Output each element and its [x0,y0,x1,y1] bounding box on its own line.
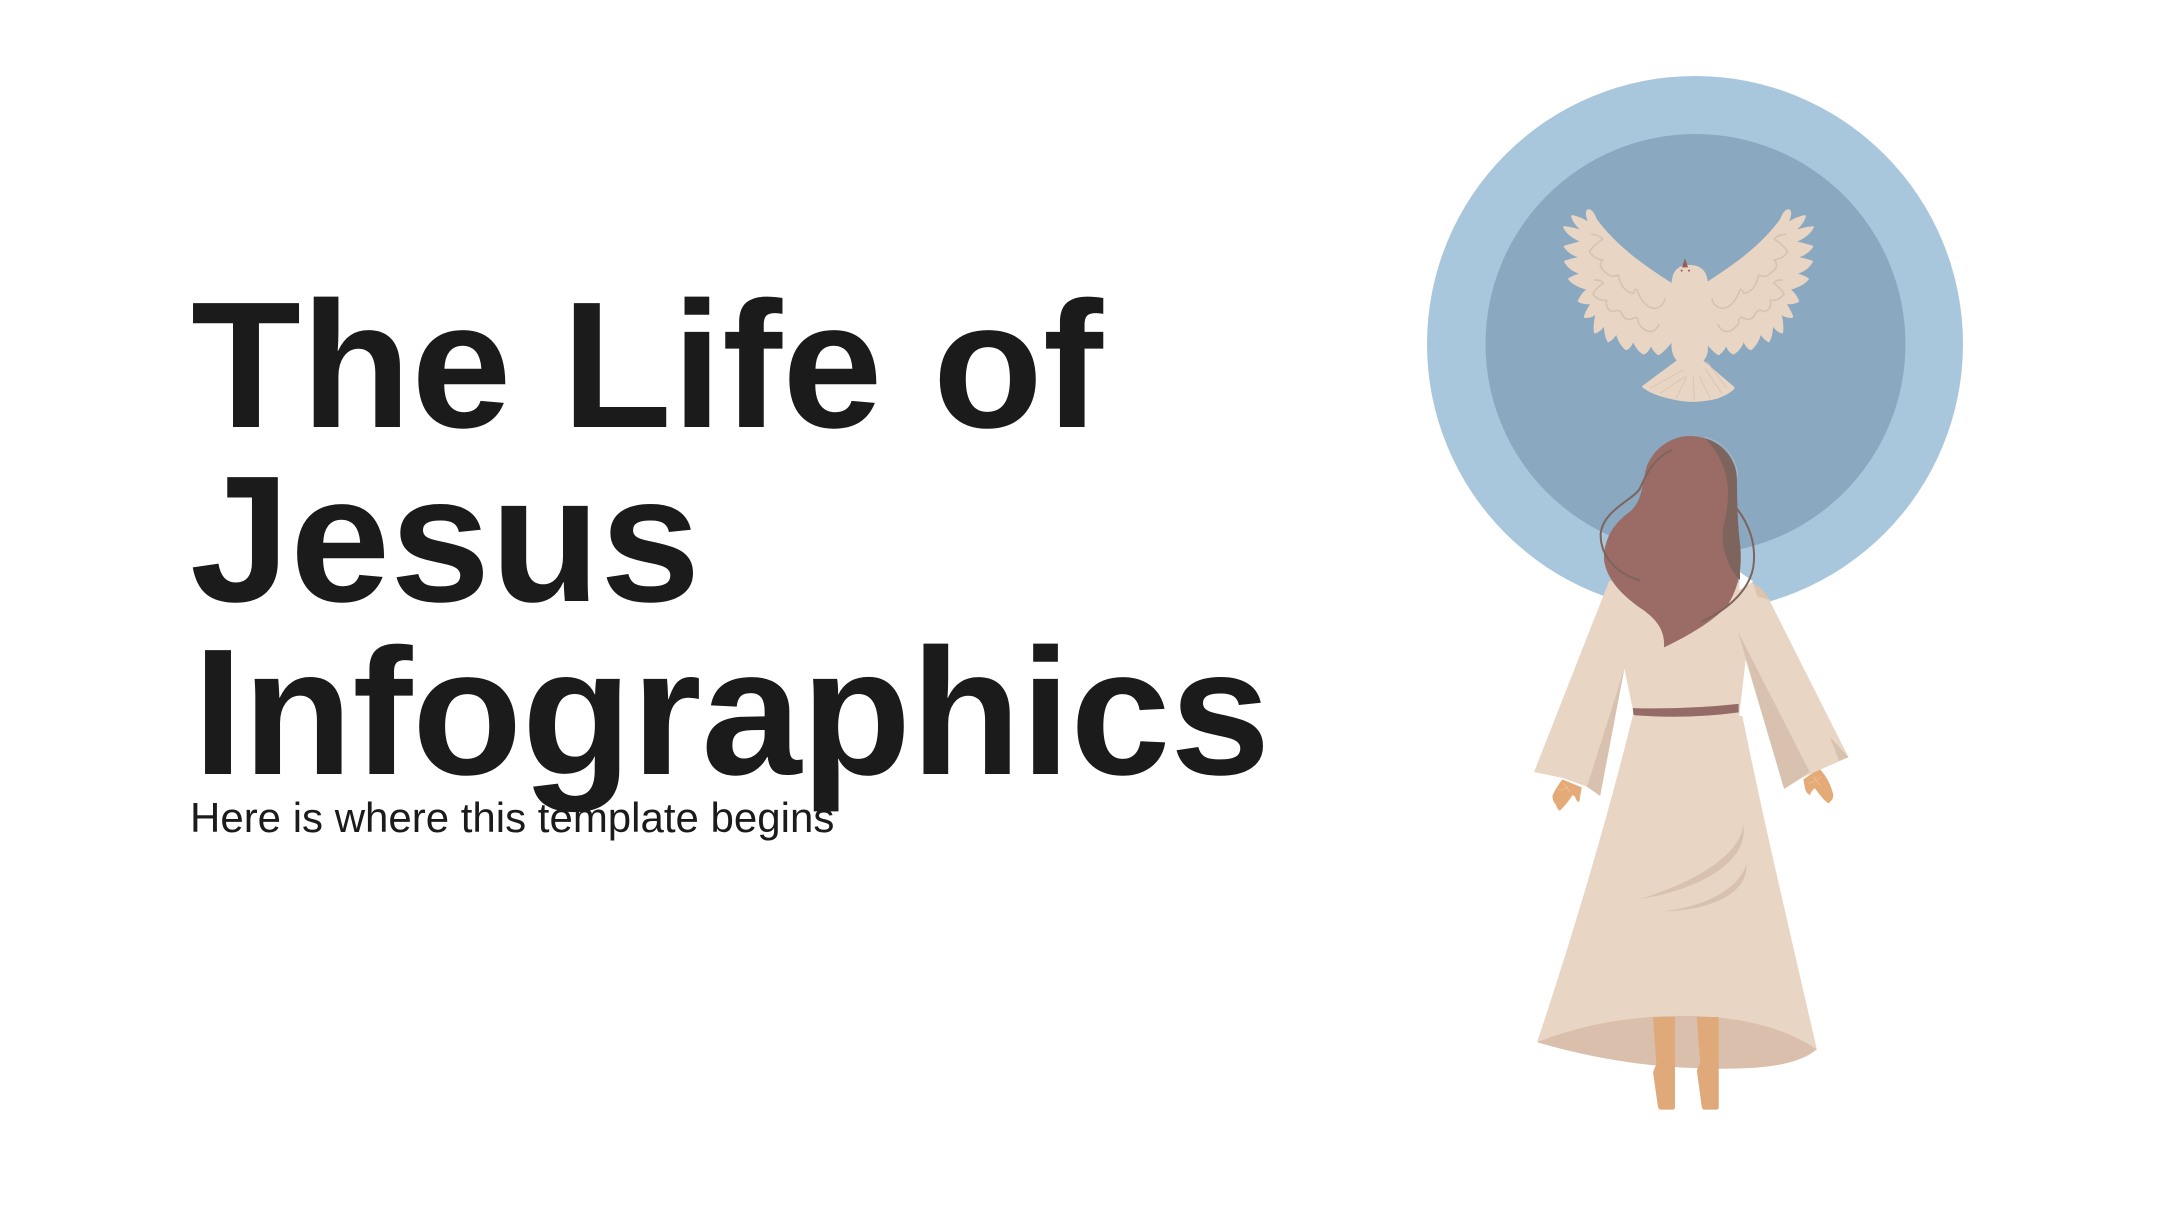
title: The Life of [191,265,1103,466]
subtitle: Here is where this template begins [190,794,834,840]
hair shadow [1705,438,1740,580]
figure: robed Jesus [1534,581,1848,1110]
title: Infographics [193,612,1270,813]
robe sleeves and torso [1534,581,1848,796]
halo: inner circle [1486,134,1906,554]
icon: dove [1564,210,1813,401]
legs and feet [1653,1017,1719,1110]
hair [1601,436,1754,647]
hair highlight [1705,437,1738,477]
left hand [1552,779,1582,811]
title [190,265,1270,813]
belt [1633,704,1739,717]
robe folds [1640,825,1744,899]
hair mass [1604,436,1741,647]
gap beside the neck [1739,572,1753,590]
skirt [1537,716,1817,1069]
hem shadow [1537,1016,1817,1069]
hair strands [1601,450,1754,622]
right hand [1803,768,1833,803]
title: Jesus [190,438,700,640]
halo: outer circle [1427,76,1963,612]
sleeve shadows [1587,668,1624,796]
